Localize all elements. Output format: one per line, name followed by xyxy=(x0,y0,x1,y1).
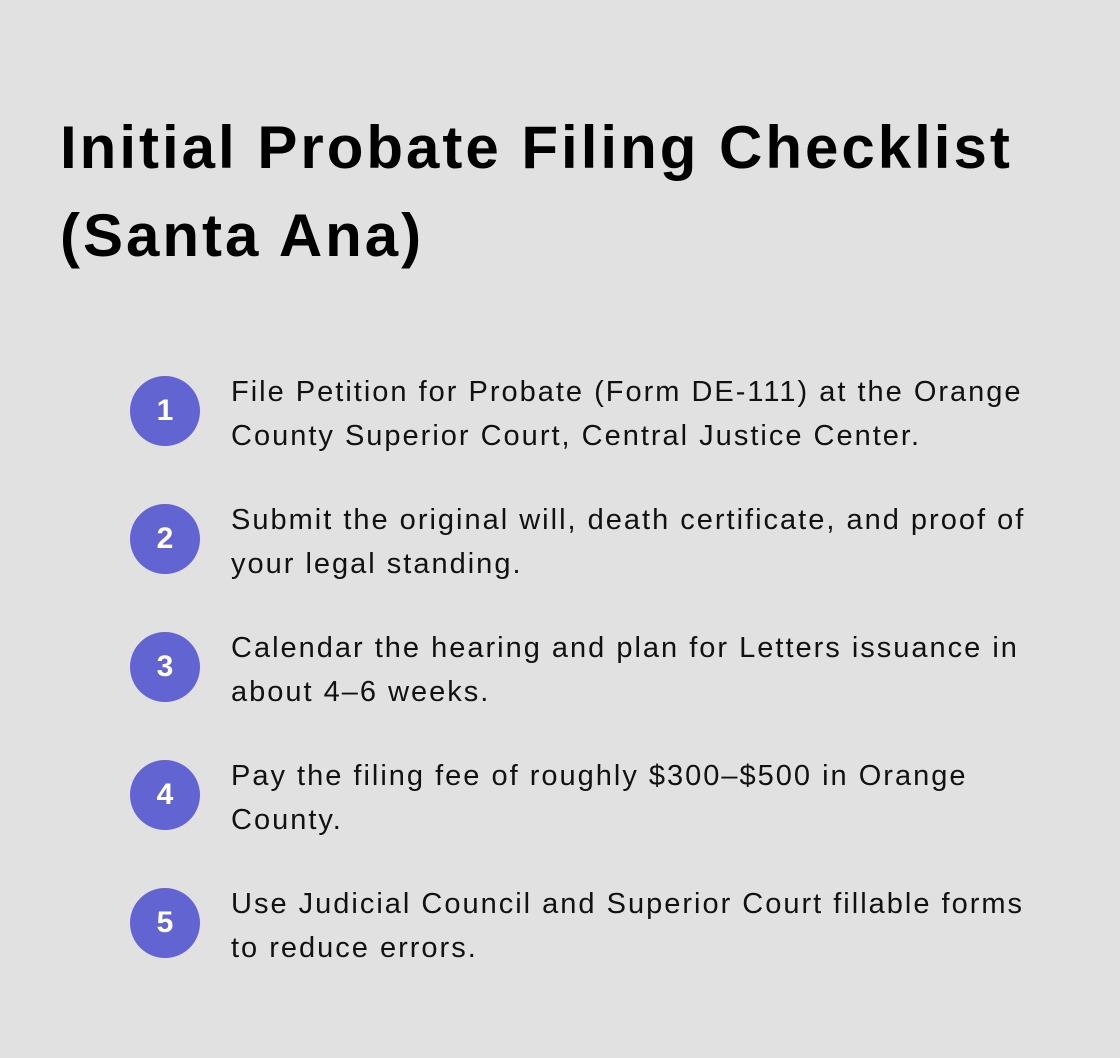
item 2: 2 xyxy=(157,522,173,555)
item 5: 5 xyxy=(157,906,173,939)
item 2: Submit the original will, death certificate, and proof of your legal standing. xyxy=(231,504,1025,580)
item 3: 3 xyxy=(157,650,173,683)
item 4: 4 xyxy=(157,778,173,811)
item 3: Calendar the hearing and plan for Letters issuance in about 4–6 weeks. xyxy=(231,632,1019,708)
title: Initial Probate Filing Checklist (Santa Ana) xyxy=(60,114,1013,269)
item 5: Use Judicial Council and Superior Court fillable forms to reduce errors. xyxy=(231,888,1024,964)
item 1: 1 xyxy=(157,394,173,427)
item 1: File Petition for Probate (Form DE-111) at the Orange County Superior Court, Central Justice Center. xyxy=(231,376,1023,452)
item 4: Pay the filing fee of roughly $300–$500 in Orange County. xyxy=(231,760,967,836)
